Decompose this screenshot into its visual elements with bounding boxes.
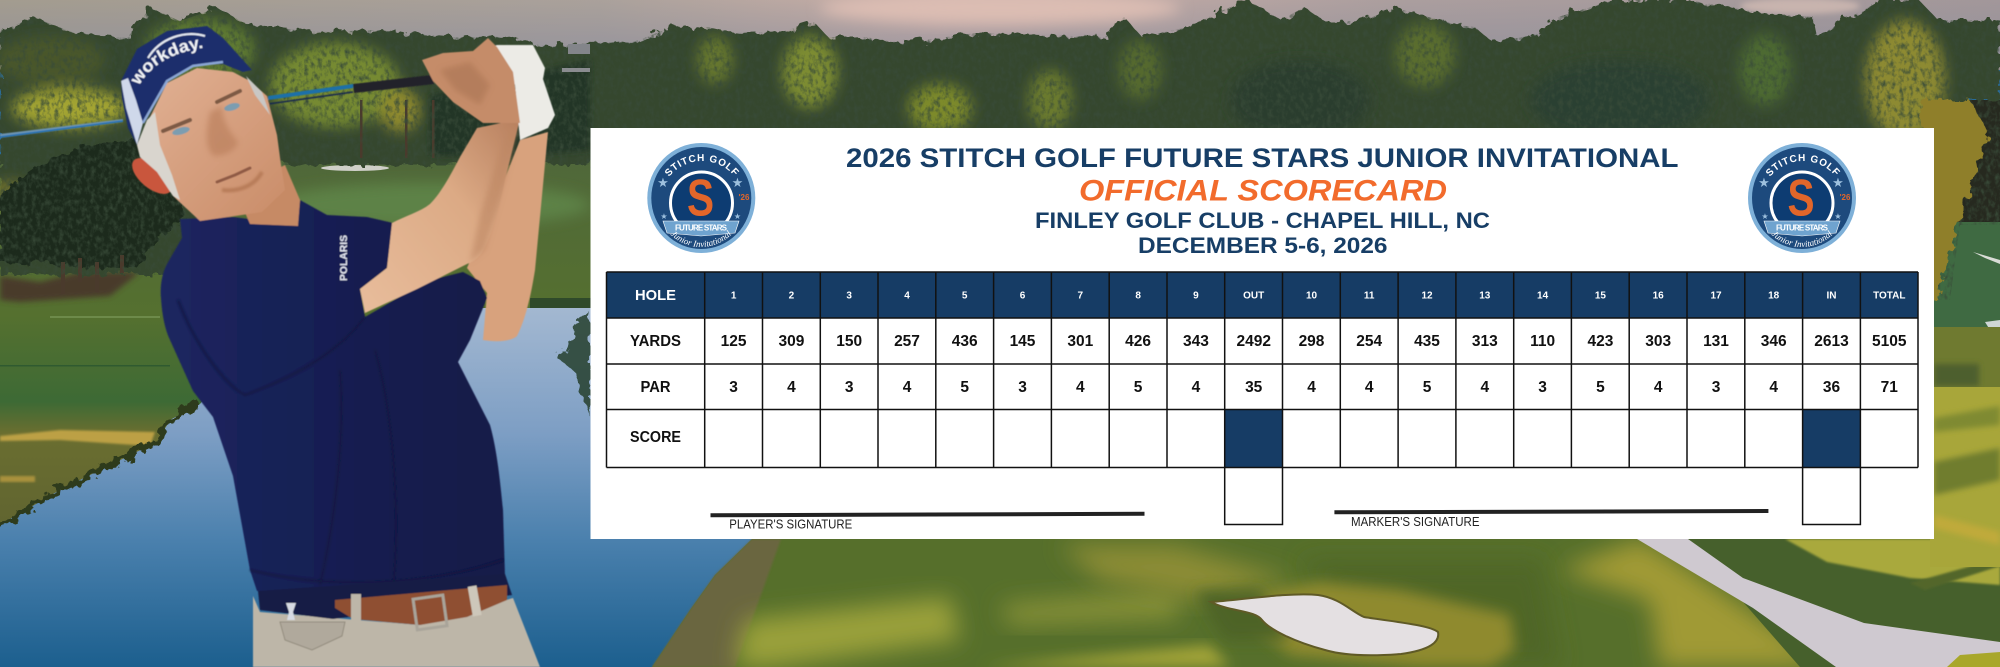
header row labels: 2 [789,290,795,302]
header row labels: HOLE [635,287,676,304]
par row: 4 [1307,379,1316,396]
facial features [163,91,262,190]
title: 2026 STITCH GOLF FUTURE STARS JUNIOR INVITATIONAL [846,143,1678,173]
par row: 4 [787,379,796,396]
header row labels: 14 [1537,290,1549,302]
sleeve logo: POLARIS [338,235,350,281]
par row: 4 [1480,379,1489,396]
marker signature: MARKER'S SIGNATURE [1351,514,1480,529]
header row labels: 5 [962,290,968,302]
leather belt [335,585,507,625]
yards row: 313 [1472,333,1498,350]
in score cell [1802,410,1860,468]
par row: 3 [1538,379,1547,396]
header row labels: 6 [1020,290,1026,302]
yellow tree at right edge [1920,100,1988,300]
sunlit foliage patches [0,18,1945,209]
header row labels: 9 [1193,290,1199,302]
par row: 5 [1134,379,1143,396]
yards row: 254 [1356,333,1383,350]
logo right: '26 [1840,193,1851,202]
par row: 3 [729,379,738,396]
belt loop [351,594,361,638]
yards row: 435 [1414,333,1440,350]
ear [126,151,178,201]
left shoreline [0,404,200,525]
glove [477,45,555,140]
logo right: FUTURE STARS [1776,224,1829,232]
yards row: 309 [778,333,805,350]
pants pocket [280,622,345,650]
yards row: 110 [1530,333,1555,350]
yards row: 131 [1703,333,1729,350]
out score cell [1224,410,1282,468]
logo left: S [687,169,714,227]
par row: 4 [1654,379,1663,396]
header row labels: TOTAL [1873,290,1906,302]
building in distance [562,44,590,72]
tree reflection in lake [557,312,590,417]
header row labels: 3 [846,290,852,302]
belt buckle [413,595,447,630]
logo right: ★ [1832,175,1844,190]
header row labels: 8 [1135,290,1141,302]
par row: 71 [1881,379,1898,396]
par row [640,379,1898,396]
belt [258,574,512,619]
par row: 5 [1596,379,1605,396]
player signature: PLAYER'S SIGNATURE [729,516,853,532]
neck [235,165,300,226]
left lawn [0,160,620,550]
cap logo arc [148,34,205,58]
logo left: STITCH GOLF [665,154,740,176]
logo left: ★ [657,175,669,190]
header row labels: 12 [1421,290,1433,302]
par row: 4 [903,379,912,396]
yards row: 150 [836,333,862,350]
trophy belt emblem [286,603,296,620]
logo right: ★ [1834,212,1842,221]
par row: 4 [1365,379,1374,396]
grid lines [606,272,1918,524]
tree trunks [61,100,434,294]
header row labels: OUT [1243,290,1264,302]
golf club shaft [0,75,434,138]
cart path [1637,539,2000,667]
header row labels: 17 [1710,290,1722,302]
yards row [630,333,1907,350]
face [137,68,285,221]
logo right: ★ [1758,175,1770,190]
yards row: 346 [1761,333,1787,350]
right edge: lawn [1930,100,2000,567]
logo right: ★ [1761,212,1769,221]
venue: FINLEY GOLF CLUB - CHAPEL HILL, NC [1035,208,1490,233]
logo left: ★ [734,212,741,221]
header row labels: 16 [1653,290,1664,302]
hair right [246,76,270,115]
yards row: 298 [1299,333,1325,350]
yards row: 301 [1067,333,1094,350]
yards row: YARDS [630,333,681,350]
knuckle shadow [440,62,490,105]
yards row: 5105 [1872,333,1907,350]
par row: 4 [1076,379,1085,396]
cap [121,26,252,145]
logo right: S [1787,169,1815,227]
par row: 3 [845,379,854,396]
logo left: '26 [739,193,750,202]
dark trees behind golfer [430,60,590,158]
hair [137,112,180,200]
yards row: 125 [721,333,747,350]
header row labels: 10 [1306,290,1317,302]
par row: 5 [960,379,969,396]
hand [422,38,520,123]
logo right: STITCH GOLF [1766,154,1840,176]
yards row: 436 [952,333,978,350]
par row: 5 [1423,379,1432,396]
logo left: Junior Invitational [670,230,732,247]
subtitle: official scorecard: OFFICIAL SCORECARD [1079,174,1447,208]
yards row: 145 [1010,333,1036,350]
header row labels: 15 [1595,290,1606,302]
par row: PAR [640,379,670,396]
lower fairway [652,539,2000,667]
header row labels: IN [1826,290,1836,302]
pants belt loop [468,585,482,616]
par row: 35 [1245,379,1263,396]
date: DECEMBER 5-6, 2026 [1138,233,1388,258]
panel: scorecard [590,128,1934,539]
yards row: 423 [1587,333,1614,350]
lawn highlights [0,165,600,366]
cap brim edge [143,62,223,123]
yards row: 303 [1645,333,1672,350]
par row: 3 [1712,379,1721,396]
cap logo text: workday. [130,38,204,84]
par row: 4 [1192,379,1201,396]
lake [0,308,1000,667]
logo left: ★ [732,175,743,190]
par row: 3 [1018,379,1027,396]
par row: 36 [1823,379,1840,396]
header row labels: 13 [1479,290,1491,302]
dark foreground trees left [0,135,185,270]
pants [253,596,540,667]
header row labels: 4 [904,290,910,302]
sky [0,0,2000,70]
logo left: ★ [660,212,668,221]
logo left: FUTURE STARS [675,224,728,232]
scorecard table [606,272,1918,524]
par row: 4 [1769,379,1778,396]
header row labels: 7 [1078,290,1084,302]
header row labels: 18 [1768,290,1780,302]
header row labels [635,287,1906,304]
header row labels: 1 [731,290,737,302]
header row background [606,272,1918,318]
back arm [467,132,548,341]
logo right [1748,143,1856,253]
shirt [161,200,505,595]
yards row: 343 [1183,333,1209,350]
logo right: Junior Invitational [1771,230,1832,247]
yards row: 2613 [1814,333,1849,350]
sand bunker [1211,594,1438,655]
yards row: 257 [894,333,920,350]
golfer [0,26,556,667]
forearm shading [470,125,518,262]
sunlit streaks on left shore [0,430,155,482]
score row label: SCORE [630,429,681,446]
header row labels: 11 [1364,290,1375,302]
tree line [0,0,2000,300]
yards row: 2492 [1236,333,1271,350]
logo left [647,143,756,253]
front forearm [360,119,520,313]
yards row: 426 [1125,333,1151,350]
cap side mesh [121,78,143,145]
shirt folds [178,300,503,590]
